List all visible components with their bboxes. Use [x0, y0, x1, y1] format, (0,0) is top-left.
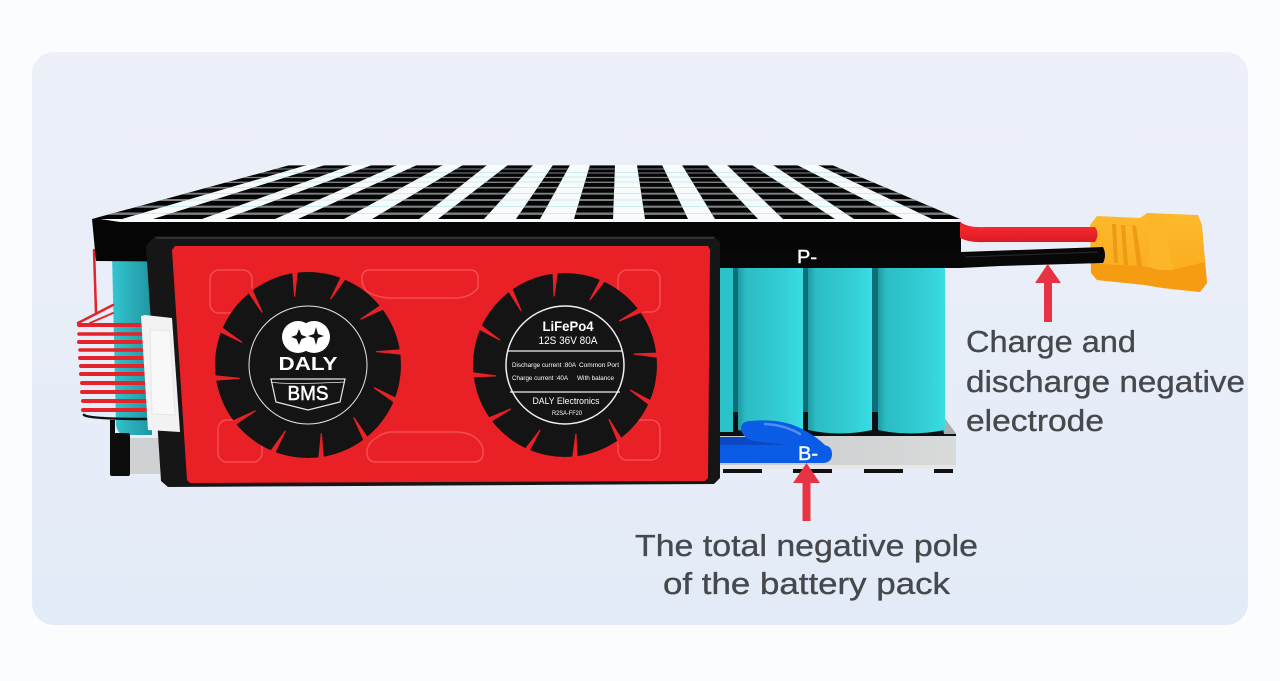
red positive wire: [960, 222, 1098, 242]
text: charge and discharge negative electrode: Charge and: [966, 324, 1136, 359]
spec text: DALY Electronics: [532, 396, 600, 407]
spec text: With balance: [577, 376, 615, 382]
BMS badge: [271, 379, 345, 410]
spec text: Charge current :40A: [512, 376, 568, 382]
label: B-: B-: [798, 444, 818, 465]
XT connector: [1090, 213, 1207, 292]
front black band: [92, 219, 961, 268]
text: total negative pole: of the battery pack: [663, 566, 951, 601]
arrow: total negative pole: [793, 463, 820, 521]
spec text: [512, 318, 619, 417]
left side cell: [112, 255, 152, 435]
arrow: charge and discharge negative: [1035, 264, 1061, 322]
text: total negative pole: [635, 528, 978, 601]
spec text: R2SA-FF20: [552, 411, 583, 417]
balance wire coil: [78, 250, 146, 419]
spec text: 12S 36V 80A: [538, 335, 598, 347]
battery cells: [720, 262, 945, 434]
right fan label: [470, 270, 660, 460]
top plate: [80, 165, 980, 222]
background panel: [32, 52, 1248, 625]
left tray block: [110, 420, 160, 476]
infographic canvas: [32, 52, 1248, 625]
tray base: [720, 412, 956, 473]
blue negative wire: [720, 420, 832, 463]
BMS badge: BMS: [288, 383, 328, 405]
text: total negative pole: The total negative pole: [635, 528, 978, 563]
text: charge and discharge negative electrode: [966, 324, 1245, 438]
BMS housing: [146, 236, 720, 487]
spec text: LiFePo4: [542, 318, 594, 334]
DALY wordmark: DALY: [278, 354, 338, 374]
spec text: Discharge current :80A: [512, 363, 576, 369]
BMS red cover: [172, 246, 710, 483]
battery pack: [78, 165, 1207, 487]
spec text: Common Port: [579, 363, 619, 369]
black P- wire: [720, 247, 1105, 268]
text: charge and discharge negative electrode: discharge negative: [966, 364, 1245, 399]
left fan logo: [213, 270, 403, 460]
white balance connector: [141, 315, 180, 432]
text: charge and discharge negative electrode: electrode: [966, 403, 1104, 438]
embossed cover outlines: [210, 270, 660, 462]
icon: Daly logo: [282, 321, 330, 353]
label: P-: P-: [797, 247, 817, 267]
